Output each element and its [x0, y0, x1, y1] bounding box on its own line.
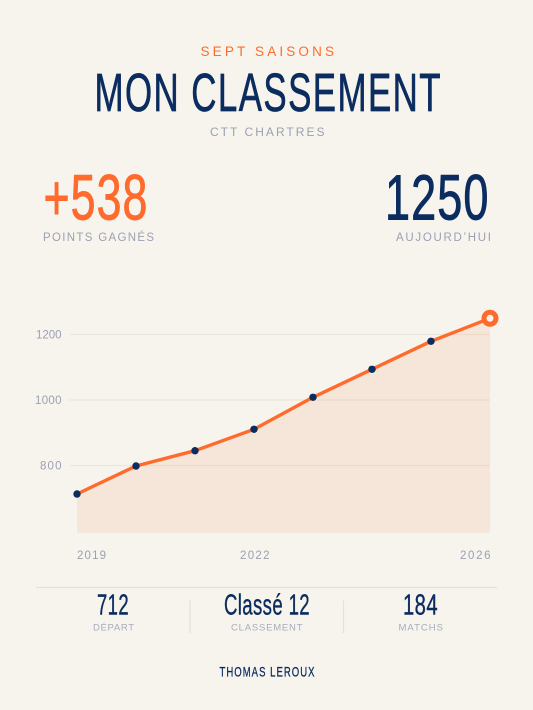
y axis labels: 1000: [35, 395, 62, 407]
stat: matches: MATCHS: [398, 622, 443, 634]
author name: THOMAS LEROUX: [220, 664, 316, 680]
chart gridlines: [70, 334, 490, 466]
final point marker: [484, 312, 496, 324]
area under line: [77, 318, 490, 533]
line chart: [35, 312, 496, 562]
x axis labels: [77, 550, 490, 562]
stat: class: CLASSEMENT: [231, 622, 303, 634]
stat: points gained: [43, 162, 154, 244]
y axis labels: [35, 330, 62, 472]
x axis labels: 2026: [460, 550, 490, 562]
stat: class: [224, 590, 310, 634]
header: [94, 44, 442, 139]
x axis labels: 2022: [240, 550, 270, 562]
stat: current ranking: [385, 162, 491, 244]
stat: class: Classé 12: [224, 590, 310, 622]
stat: matches: [398, 590, 443, 634]
subtitle: CTT CHARTRES: [210, 125, 324, 139]
y axis labels: 800: [40, 460, 62, 472]
stat: starting ranking: 712: [97, 590, 129, 622]
stat: starting ranking: [93, 590, 134, 634]
stat: starting ranking: DÉPART: [93, 622, 134, 634]
ranking line: [77, 318, 490, 494]
y axis labels: 1200: [36, 330, 62, 342]
stat: points gained: POINTS GAGNÉS: [43, 231, 154, 244]
stat: matches: 184: [403, 590, 438, 622]
stat: current ranking: 1250: [385, 162, 490, 234]
data points: [73, 338, 435, 498]
eyebrow: SEPT SAISONS: [200, 44, 334, 59]
x axis labels: 2019: [77, 550, 106, 562]
stat: current ranking: AUJOURD’HUI: [396, 232, 491, 244]
stat: points gained: +538: [44, 162, 148, 234]
